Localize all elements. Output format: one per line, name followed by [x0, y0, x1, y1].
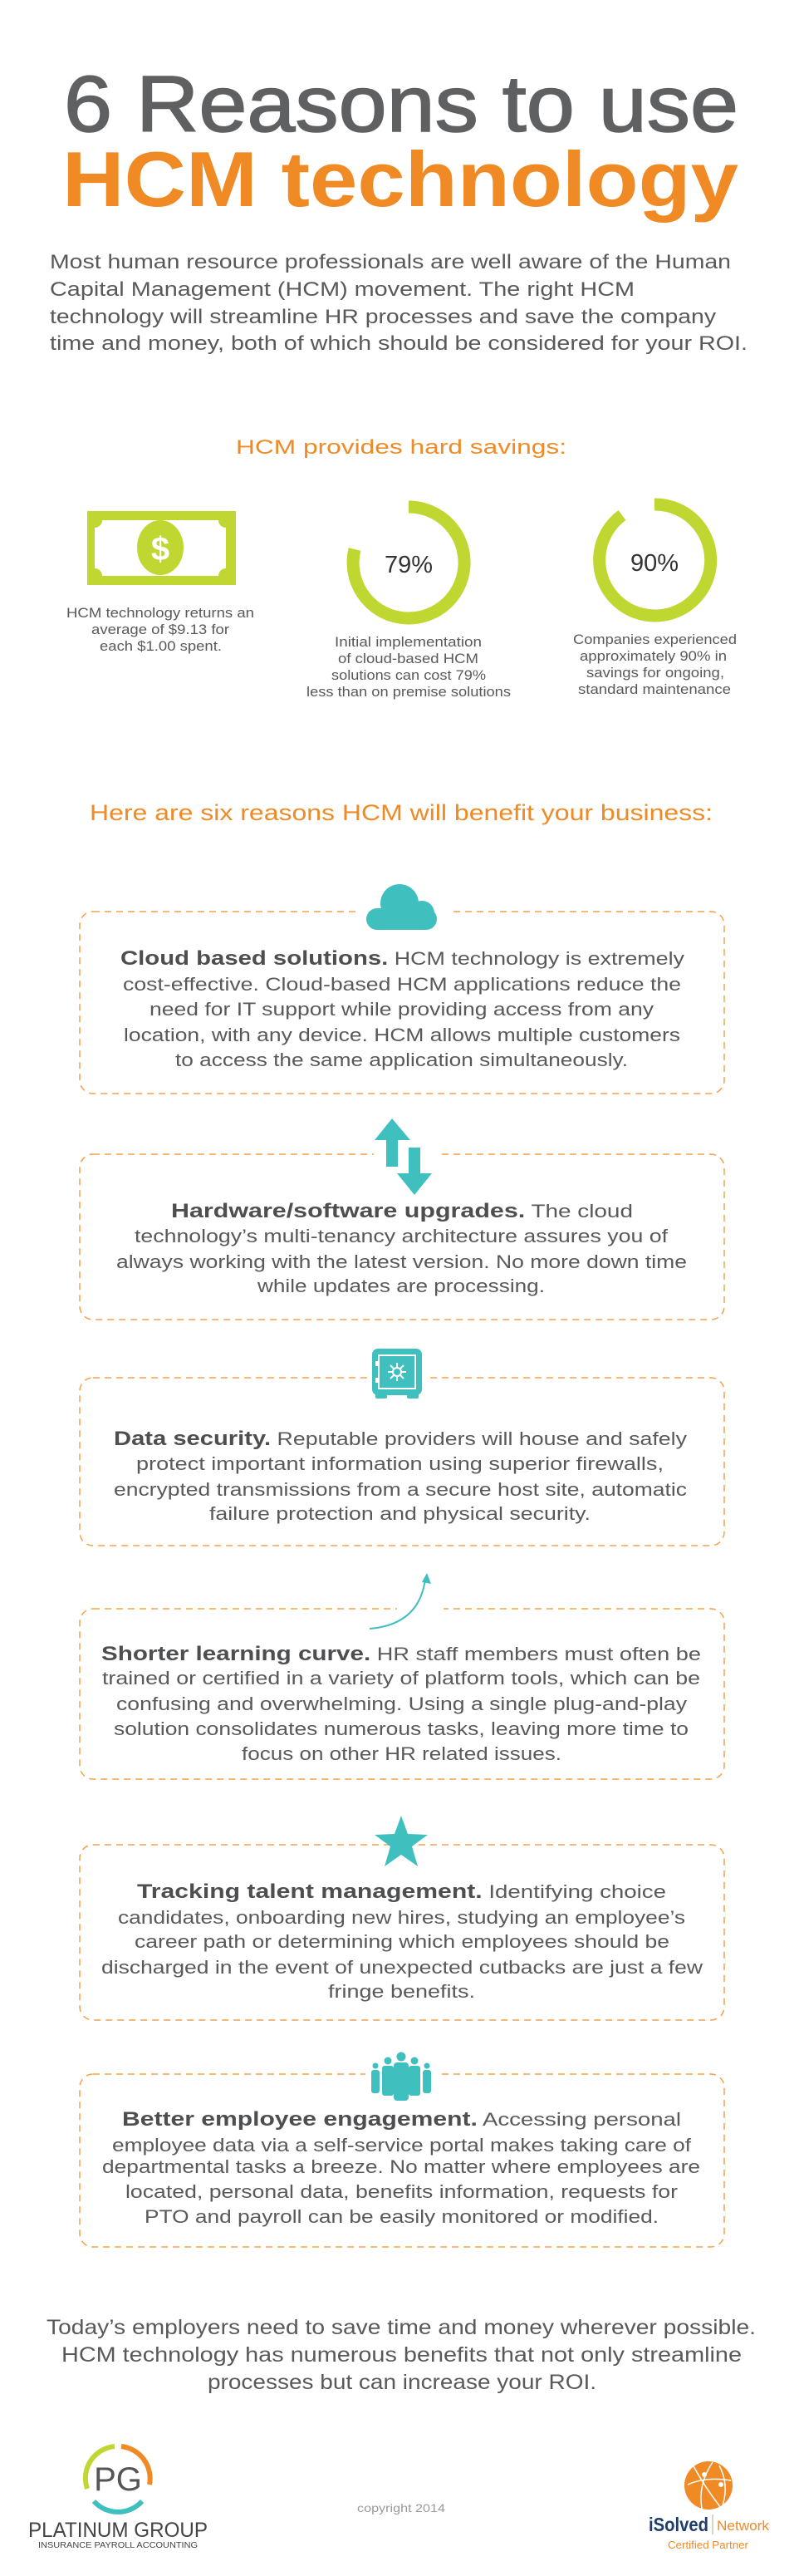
text: 90% stat: Companies experienced [573, 632, 737, 647]
text: cloud: Cloud based solutions. HCM technology is extremely [120, 947, 684, 970]
text: upgrades [116, 1200, 687, 1296]
closing paragraph: HCM technology has numerous benefits that not only streamline [61, 2343, 742, 2367]
text: engagement: Better employee engagement. Accessing personal [122, 2108, 681, 2131]
text: talent: fringe benefits. [328, 1981, 475, 2002]
icon: people [371, 2052, 431, 2101]
text: upgrades: technology’s multi-tenancy architecture assures you of [135, 1226, 669, 1246]
panel: cloud based solutions [80, 884, 724, 1094]
text: upgrades: always working with the latest version. No more down time [116, 1251, 687, 1272]
logo: Platinum Group [28, 2446, 208, 2550]
text: security: encrypted transmissions from a secure host site, automatic [114, 1479, 687, 1500]
intro paragraph: time and money, both of which should be considered for your ROI. [50, 332, 748, 355]
icon: safe [372, 1349, 422, 1399]
icon: star [375, 1816, 428, 1866]
text: learning curve: trained or certified in a variety of platform tools, which can be [102, 1668, 700, 1689]
text: 90% stat: approximately 90% in [580, 648, 727, 664]
text: upgrades: while updates are processing. [257, 1276, 545, 1296]
intro paragraph [50, 251, 748, 355]
text: upgrades: Hardware/software upgrades. The cloud [171, 1200, 633, 1222]
text: talent: Tracking talent management. Identifying choice [137, 1880, 666, 1903]
text: cloud: cost-effective. Cloud-based HCM applications reduce the [123, 974, 681, 995]
title: HCM technology [62, 135, 738, 223]
chart: 90% ring: 90% [630, 550, 679, 577]
text: talent: discharged in the event of unexpected cutbacks are just a few [101, 1957, 703, 1978]
logo: Platinum Group: INSURANCE PAYROLL ACCOUNTING [38, 2541, 198, 2550]
logo: Platinum Group: PLATINUM GROUP [28, 2519, 208, 2542]
chart: 79% ring [353, 507, 464, 618]
icon: money: $ [151, 531, 169, 568]
closing paragraph: processes but can increase your ROI. [208, 2371, 596, 2394]
intro paragraph: Capital Management (HCM) movement. The right HCM [50, 278, 635, 301]
chart: 79% ring: 79% [385, 552, 433, 578]
panel: shorter learning curve [80, 1573, 724, 1779]
text: security: Data security. Reputable providers will house and safely [114, 1428, 687, 1450]
text: cloud: need for IT support while providing access from any [150, 999, 654, 1020]
text: cloud: location, with any device. HCM allows multiple customers [124, 1025, 680, 1045]
text: security: failure protection and physical security. [209, 1503, 591, 1524]
text: 79% stat [306, 634, 511, 700]
icon: up/down arrows [375, 1118, 432, 1195]
text: cloud [120, 947, 684, 1070]
copyright: copyright 2014 [357, 2501, 445, 2515]
title [62, 60, 738, 223]
text: learning curve: Shorter learning curve. HR staff members must often be [101, 1643, 701, 1665]
text: learning curve: focus on other HR related issues. [242, 1743, 561, 1764]
text: talent [101, 1880, 703, 2002]
intro paragraph: technology will streamline HR processes and save the company [50, 306, 716, 328]
heading: six reasons: Here are six reasons HCM will benefit your business: [90, 800, 713, 825]
text: 79% stat: solutions can cost 79% [331, 667, 486, 683]
chart: 90% ring [600, 504, 711, 616]
text: talent: candidates, onboarding new hires, studying an employee’s [118, 1907, 685, 1928]
icon: cloud [366, 884, 437, 930]
text: cloud: to access the same application simultaneously. [175, 1050, 628, 1070]
panel: tracking talent management [80, 1816, 724, 2020]
text: money stat: HCM technology returns an [66, 605, 254, 621]
closing paragraph [47, 2316, 756, 2394]
panel: better employee engagement [80, 2052, 724, 2247]
text: learning curve: confusing and overwhelming. Using a single plug-and-play [116, 1694, 687, 1714]
intro paragraph: Most human resource professionals are well aware of the Human [50, 251, 731, 273]
heading: hard savings: HCM provides hard savings: [236, 436, 566, 459]
text: learning curve: solution consolidates numerous tasks, leaving more time to [114, 1718, 689, 1739]
text: security: protect important information using superior firewalls, [136, 1453, 664, 1474]
logo: iSolved Network [649, 2461, 769, 2551]
text: 90% stat: savings for ongoing, [586, 665, 724, 681]
text: 90% stat [573, 632, 737, 697]
closing paragraph: Today’s employers need to save time and money wherever possible. [47, 2316, 756, 2339]
logo: iSolved Network: Certified Partner [668, 2539, 749, 2551]
text: money stat: each $1.00 spent. [100, 638, 222, 654]
logo: iSolved Network: Network [717, 2518, 769, 2534]
title: 6 Reasons to use [64, 60, 738, 149]
logo: iSolved Network: iSolved [649, 2514, 708, 2535]
text: 79% stat: less than on premise solutions [306, 684, 511, 700]
icon: curved arrow [370, 1573, 431, 1629]
text: talent: career path or determining which employees should be [135, 1931, 669, 1952]
text: security [114, 1428, 687, 1524]
text: engagement: departmental tasks a breeze. No matter where employees are [102, 2156, 700, 2177]
text: engagement: located, personal data, benefits information, requests for [125, 2181, 678, 2202]
panel: data security [80, 1349, 724, 1546]
panel: hardware/software upgrades [80, 1118, 724, 1320]
text: engagement [102, 2108, 700, 2227]
logo: Platinum Group: PG [94, 2461, 142, 2498]
text: engagement: employee data via a self-service portal makes taking care of [112, 2135, 692, 2156]
text: 79% stat: Initial implementation [335, 634, 482, 650]
text: engagement: PTO and payroll can be easily monitored or modified. [145, 2206, 659, 2227]
text: money stat: average of $9.13 for [91, 622, 229, 637]
text: 90% stat: standard maintenance [578, 681, 731, 697]
text: 79% stat: of cloud-based HCM [338, 651, 478, 666]
icon: money [87, 511, 236, 585]
text: money stat [66, 605, 254, 654]
text: learning curve [101, 1643, 701, 1764]
